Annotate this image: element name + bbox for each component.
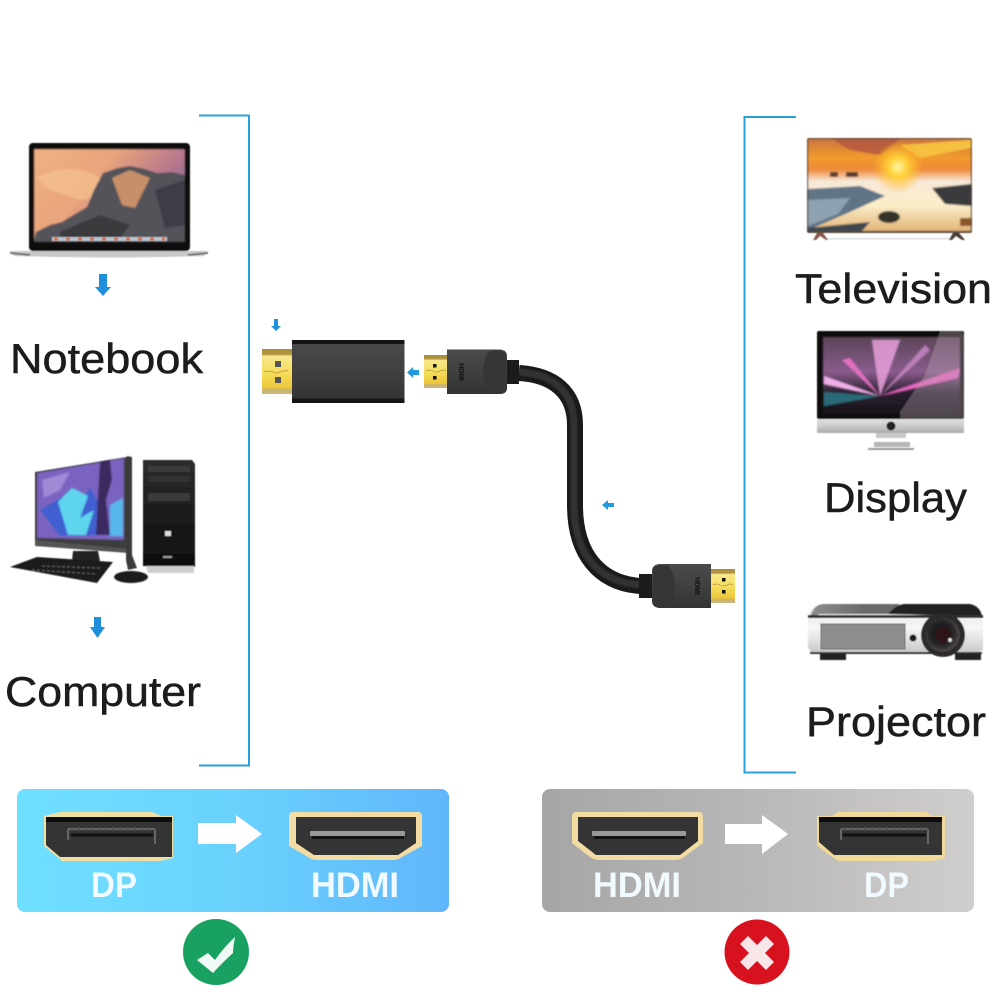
label: DP: DP: [91, 866, 137, 905]
label: Television: Television: [795, 265, 992, 312]
label: Computer: Computer: [5, 668, 201, 715]
connector: DP port: [44, 812, 173, 861]
connector: HDMI port: [289, 812, 422, 860]
panel: HDMI to DP not supported: [542, 789, 974, 912]
cable with HDMI plugs: HDMI: [457, 363, 464, 381]
arrow: adapter: [271, 319, 281, 331]
label: Display: Display: [824, 474, 967, 521]
arrow: cable: [602, 500, 614, 510]
label: HDMI: HDMI: [311, 866, 399, 905]
cable with HDMI plugs: HDMI: [693, 577, 700, 595]
icon: green check: [183, 919, 249, 985]
label: DP: DP: [864, 866, 909, 905]
icon: notebook: [10, 143, 208, 258]
arrow: conversion: [198, 815, 262, 853]
label: Notebook: Notebook: [10, 335, 204, 382]
icon: red cross: [724, 920, 790, 984]
arrow: notebook down: [95, 274, 111, 296]
DP adapter: [262, 340, 404, 403]
panel: DP to HDMI supported: [17, 789, 449, 912]
connector: HDMI port: [572, 812, 703, 860]
connector: DP port: [817, 812, 945, 861]
arrow: computer down: [90, 617, 105, 638]
arrow: adapter input: [407, 367, 419, 378]
icon: television: [807, 138, 972, 240]
icon: display: [817, 331, 964, 450]
icon: computer: [10, 456, 195, 583]
left bracket: [199, 116, 249, 766]
right bracket: [744, 117, 796, 772]
cable with HDMI plugs: [424, 350, 735, 608]
label: Projector: Projector: [806, 698, 986, 745]
arrow: conversion: [725, 815, 788, 854]
icon: projector: [808, 604, 983, 660]
label: HDMI: HDMI: [593, 866, 681, 905]
